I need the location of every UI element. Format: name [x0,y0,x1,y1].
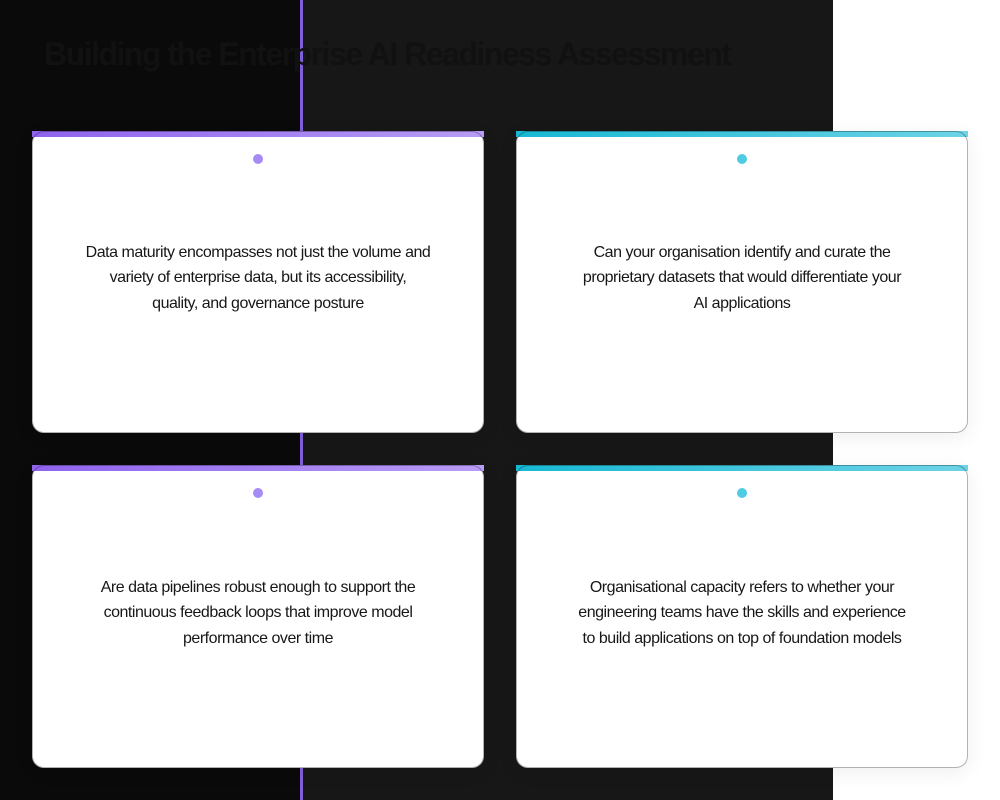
text: organisational capacity [578,579,906,647]
text: organisational capacity: to build applications on top of foundation models [583,630,901,647]
text: data pipelines: continuous feedback loops that improve model [104,604,412,621]
text: data maturity: Data maturity encompasses not just the volume and [86,244,430,261]
icon: cyan dot [737,154,747,164]
text: data pipelines: performance over time [183,630,333,647]
text: proprietary datasets: AI applications [694,295,790,312]
background: left dark column [0,0,300,800]
text: data maturity: quality, and governance posture [152,295,364,312]
text: organisational capacity: engineering teams have the skills and experience [578,604,906,621]
title: Building the Enterprise AI Readiness Assessment [44,36,730,72]
panel: data maturity [32,131,484,436]
text: proprietary datasets: proprietary datasets that would differentiate your [583,269,901,286]
text: data pipelines [100,579,416,647]
panel: data pipelines [32,465,484,770]
text: data maturity [86,244,430,312]
icon: cyan dot [737,488,747,498]
text: data maturity: variety of enterprise data, but its accessibility, [110,269,406,286]
text: proprietary datasets: Can your organisation identify and curate the [594,244,890,261]
icon: purple dot [253,154,263,164]
panel: organisational capacity [516,465,968,772]
icon: purple dot [253,488,263,498]
text: organisational capacity: Organisational capacity refers to whether your [590,579,894,596]
vertical purple timeline line [300,0,303,800]
panel: proprietary datasets [516,131,968,437]
text: data pipelines: Are data pipelines robust enough to support the [101,579,415,596]
background: right dark column [303,0,833,800]
text: proprietary datasets [583,244,902,312]
